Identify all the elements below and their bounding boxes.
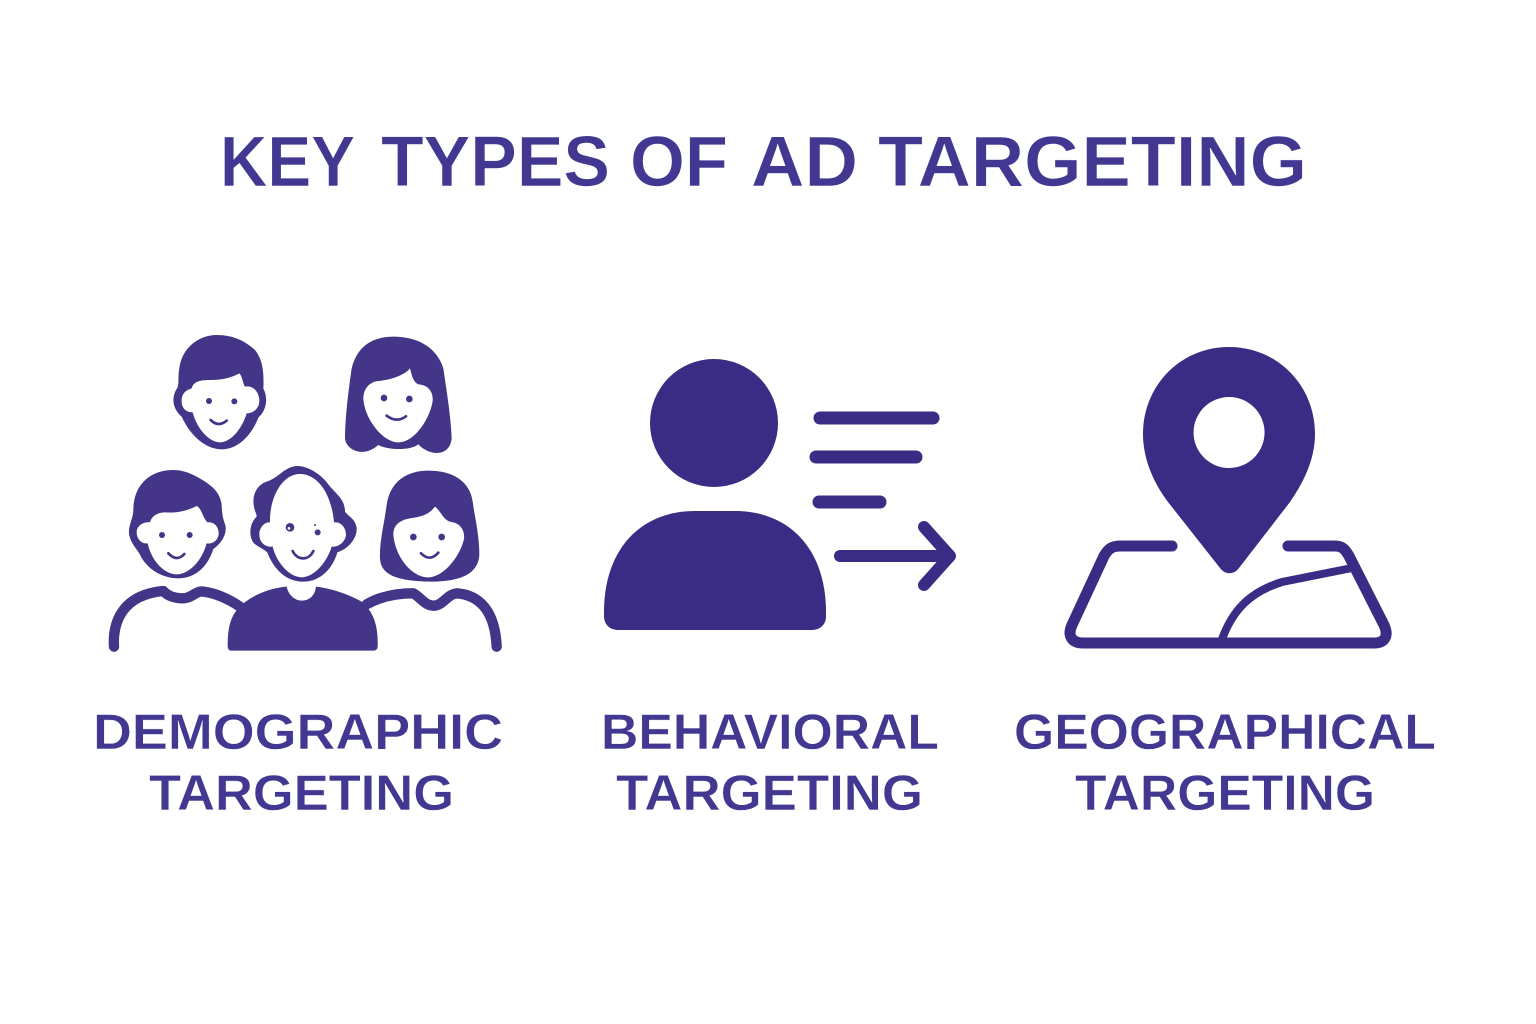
- icon: behavioral person with lines and arrow: [604, 359, 950, 630]
- label: geographical targeting: GEOGRAPHICAL: [1014, 704, 1436, 760]
- title: OF: [630, 123, 728, 202]
- person: bottom center bald man: [228, 466, 378, 651]
- map road: [1221, 568, 1352, 642]
- label: demographic targeting: TARGETING: [149, 765, 454, 821]
- map pin: [1143, 347, 1315, 573]
- label: geographical targeting: TARGETING: [1075, 765, 1375, 821]
- person head: [650, 359, 778, 487]
- title: TARGETING: [878, 123, 1307, 202]
- label: behavioral targeting: TARGETING: [616, 765, 923, 821]
- label: demographic targeting: [93, 704, 503, 821]
- label: demographic targeting: DEMOGRAPHIC: [93, 704, 503, 760]
- title: AD: [751, 123, 858, 202]
- person: bottom left: [114, 470, 240, 647]
- face: top left man: [173, 335, 266, 449]
- arrow: [840, 527, 950, 585]
- title: KEY: [220, 123, 355, 202]
- person: bottom right woman: [367, 471, 497, 647]
- icon: demographic group of people: [114, 335, 497, 651]
- title: TYPES: [381, 123, 610, 202]
- label: behavioral targeting: BEHAVIORAL: [601, 704, 939, 760]
- behavior lines: [816, 418, 933, 502]
- icon: geographical map pin on map: [1070, 347, 1386, 643]
- label: geographical targeting: [1014, 704, 1436, 821]
- face: top right woman: [345, 337, 452, 453]
- title: [220, 123, 1307, 202]
- label: behavioral targeting: [601, 704, 939, 821]
- folded map: [1070, 546, 1386, 643]
- person body: [604, 511, 826, 630]
